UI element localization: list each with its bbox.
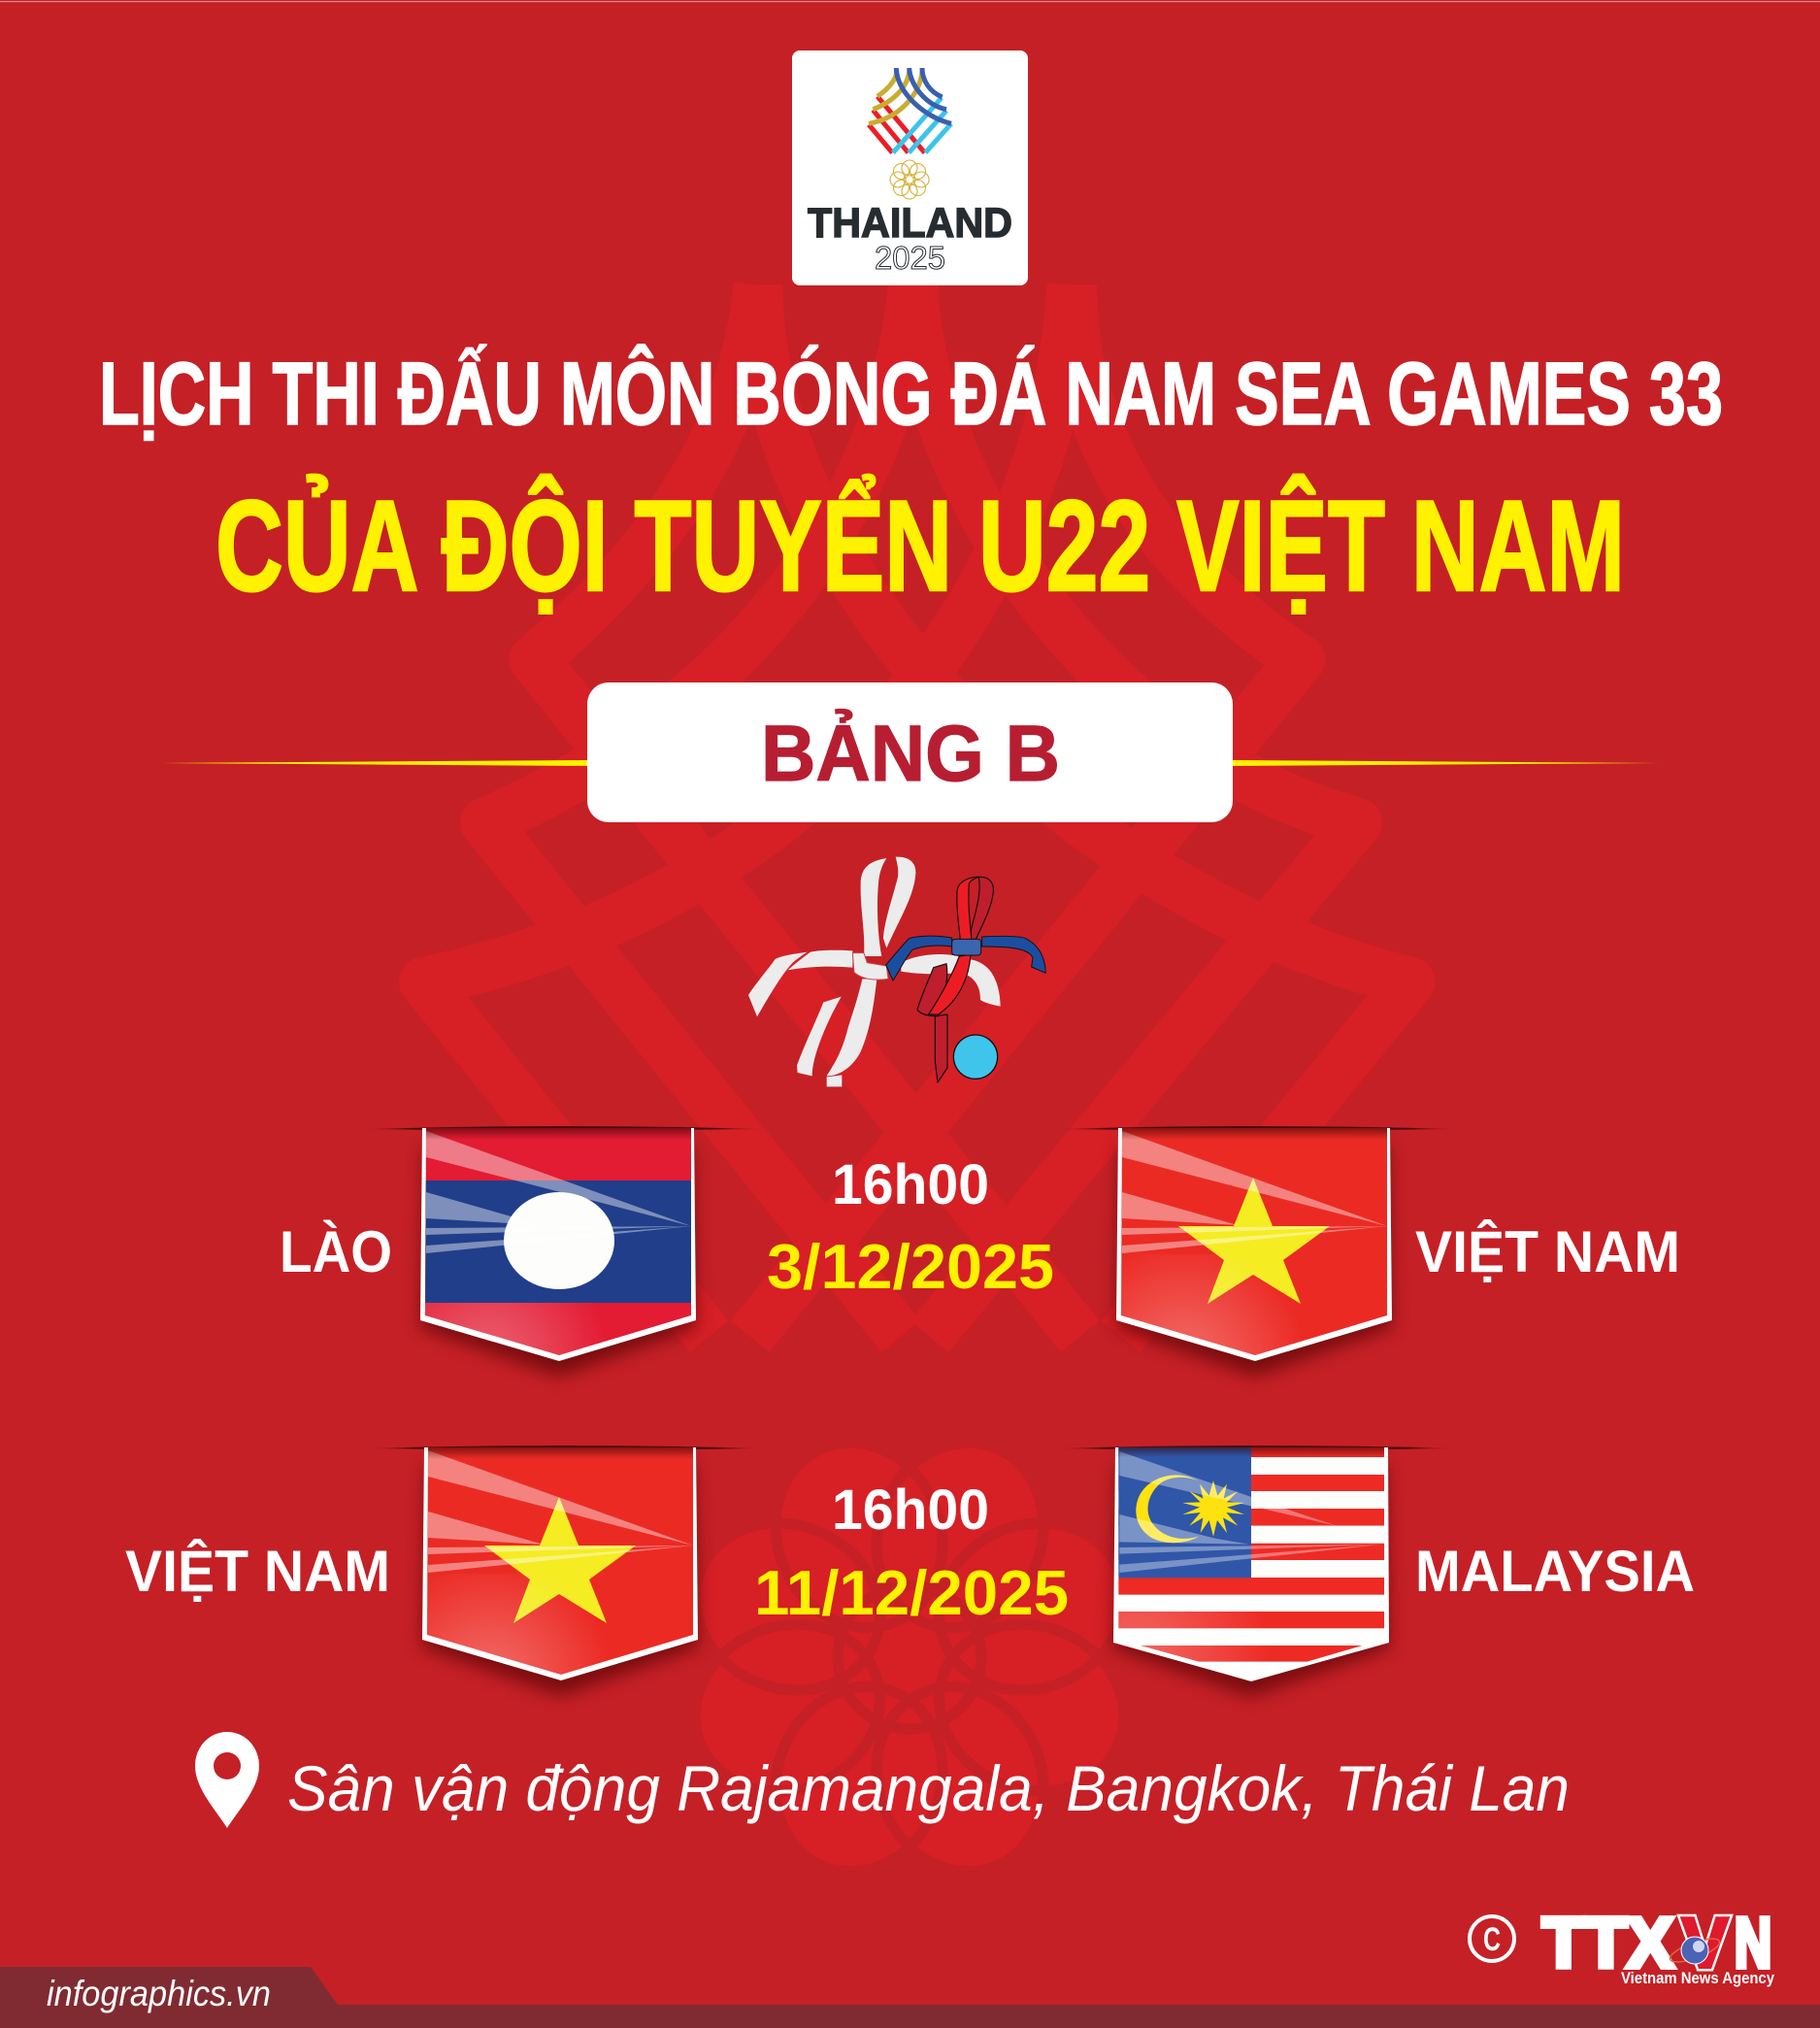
flag: Laos [364, 1126, 762, 1377]
match 2: team Vietnam: VIỆT NAM [125, 1539, 390, 1604]
flag: Vietnam (match 1) [1060, 1126, 1458, 1377]
group badge [587, 682, 1233, 822]
match 2: time: 16h00 [832, 1479, 989, 1542]
TTXVN logo [1542, 1905, 1774, 1987]
icon: sepak takraw ribbons [748, 857, 1045, 1086]
logo year: 2025 [875, 240, 945, 276]
match 1: team Vietnam: VIỆT NAM [1415, 1219, 1680, 1284]
match 2: date: 11/12/2025 [754, 1557, 1069, 1628]
blue ribbon [886, 936, 1045, 981]
copyright mark: C [1483, 1921, 1501, 1958]
group label: BẢNG B [761, 710, 1060, 798]
website label: infographics.vn [47, 1974, 271, 2013]
match 1: date: 3/12/2025 [767, 1231, 1054, 1302]
divider right [1233, 760, 1660, 766]
bottom bar [0, 1967, 1820, 2028]
ball [953, 1035, 998, 1079]
background pattern: large emblem [424, 284, 1410, 1337]
flag: Vietnam (match 2) [366, 1446, 764, 1696]
background pattern: flower [670, 1417, 1149, 1897]
TTXVN logo: V [1682, 1905, 1728, 1982]
logo text: THAILAND [808, 200, 1012, 247]
white ribbon [748, 857, 1001, 1086]
match 1: time: 16h00 [832, 1153, 989, 1216]
flag: Malaysia [1058, 1446, 1456, 1697]
TTXVN logo: TTX [1542, 1905, 1673, 1982]
copyright mark [1470, 1916, 1514, 1961]
globe [1668, 1934, 1722, 1967]
red ribbon [917, 877, 993, 1082]
match 1: team Laos: LÀO [280, 1219, 392, 1284]
TTXVN logo: V [1682, 1905, 1728, 1982]
venue text: Sân vận động Rajamangala, Bangkok, Thái Lan [287, 1752, 1570, 1824]
match 2: team Malaysia: MALAYSIA [1415, 1539, 1695, 1604]
agency name: Vietnam News Agency [1621, 1969, 1774, 1987]
logo: Thailand 2025 [792, 50, 1028, 285]
logo flower [890, 160, 929, 199]
divider left [160, 760, 587, 766]
logo emblem [869, 68, 951, 152]
TTXVN logo: N [1735, 1905, 1771, 1982]
icon: location pin [195, 1732, 259, 1828]
